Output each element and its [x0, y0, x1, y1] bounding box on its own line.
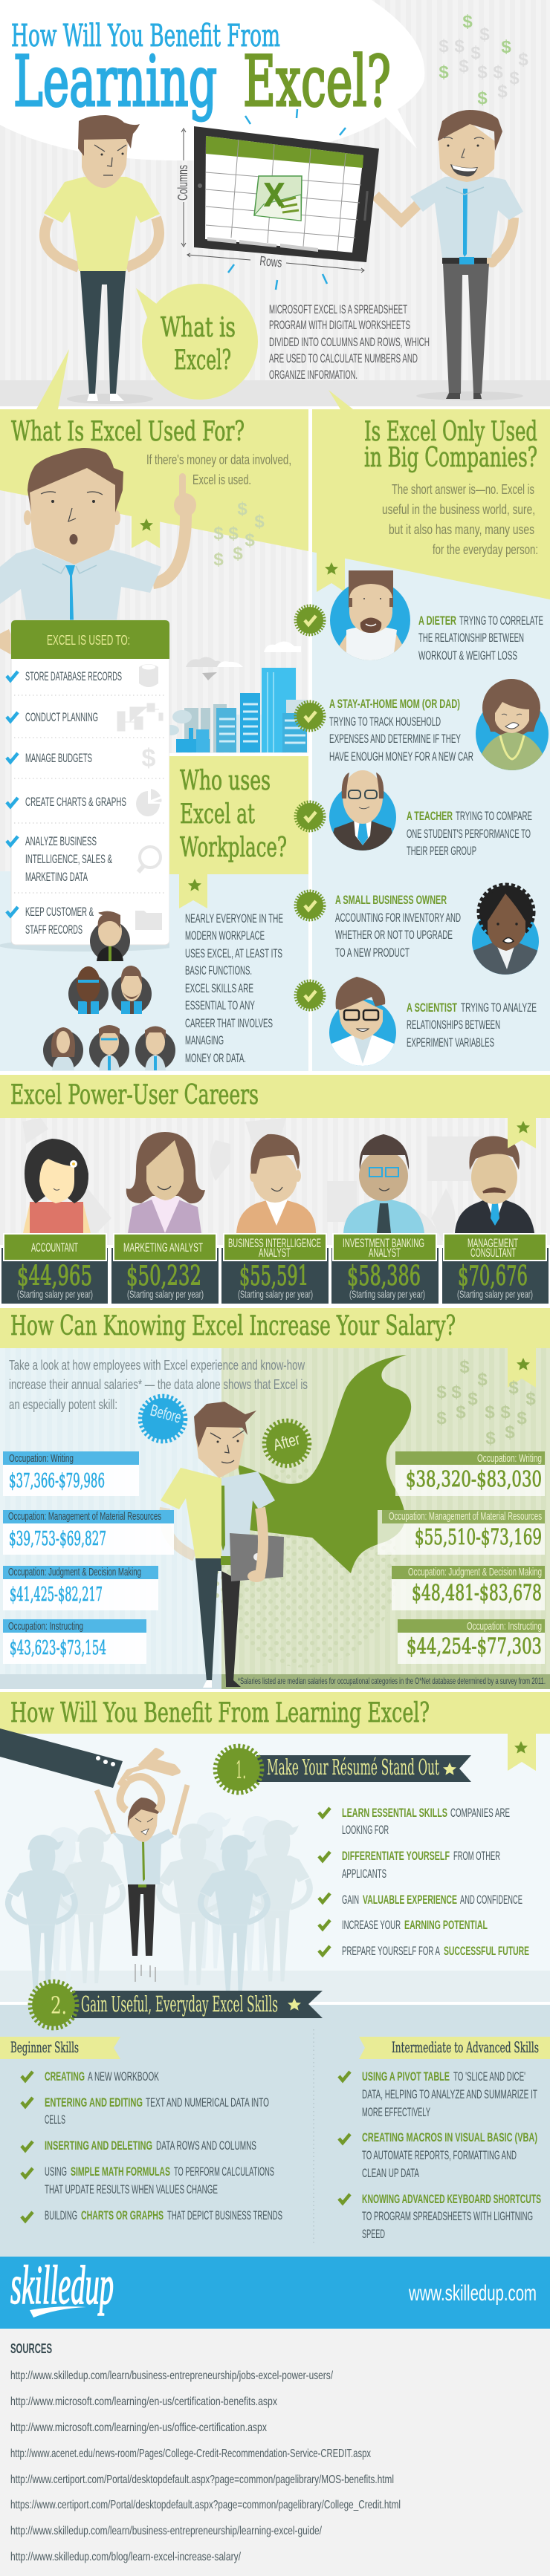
banner: gain useful skills: 2.	[51, 1991, 67, 2020]
tag: intermediate skills	[359, 2037, 550, 2059]
badge: before	[141, 1397, 184, 1440]
icon: dollar signs salary: $	[485, 1402, 495, 1422]
checklist: advanced skills: CLEAN UP DATA	[362, 2166, 419, 2180]
icon: dollar signs salary: $	[525, 1389, 536, 1409]
banner: make your resume stand out: 1.	[236, 1756, 246, 1784]
panel: sources: http://www.microsoft.com/learning/en-us/office-certification.aspx	[10, 2421, 267, 2434]
person: small business owner: ACCOUNTING FOR INVENTORY AND	[335, 911, 461, 925]
icon: dollar signs salary: $	[436, 1408, 447, 1428]
icon: falling dollar signs: $	[439, 36, 449, 56]
person: teacher	[296, 770, 532, 858]
panel: who uses Excel at workplace	[169, 753, 308, 1071]
tablet with spreadsheet	[194, 126, 379, 262]
list item: business intelligence: ANALYZE BUSINESS	[25, 834, 97, 848]
text block: definition of Excel	[269, 302, 430, 382]
card: accountant salary: $44,965	[17, 1261, 92, 1292]
panel: sources: http://www.skilledup.com/blog/learn-excel-increase-salary/	[10, 2551, 241, 2563]
list item: business intelligence	[7, 834, 161, 884]
card: management consultant salary	[442, 1234, 549, 1304]
checklist: advanced skills: SPEED	[362, 2227, 385, 2241]
list item: records	[7, 905, 162, 937]
background: intro section	[0, 0, 550, 409]
icon: falling dollar signs: $	[477, 62, 488, 82]
text block: nearly everyone: MANAGING	[185, 1033, 224, 1047]
card: marketing analyst salary	[111, 1234, 219, 1304]
ribbon: benefits	[508, 1734, 536, 1771]
card: business intelligence salary: (Starting salary per year)	[238, 1288, 313, 1300]
salary before: management	[3, 1510, 174, 1555]
panel: Excel is used to list	[0, 620, 177, 952]
icon: falling dollar signs: $	[470, 43, 481, 63]
panel: footer brand bar	[0, 2255, 550, 2329]
callout: what is Excel?	[136, 284, 258, 400]
panel: sources: http://www.acenet.edu/news-room/Pages/College-Credit-Recommendation-Service-CREDIT.aspx	[10, 2447, 371, 2460]
character: frowning man in yellow shirt	[44, 115, 160, 404]
icon: dollar signs salary: $	[456, 1402, 466, 1422]
list item: charts: CREATE CHARTS & GRAPHS	[25, 795, 126, 809]
icon: muted dollar signs: $	[213, 524, 224, 544]
panel: sources: http://www.skilledup.com/learn/business-entrepreneurship/jobs-excel-power-users/	[10, 2370, 333, 2382]
heading: who uses Excel: Who uses	[180, 766, 271, 796]
banner: make your resume stand out	[216, 1747, 471, 1792]
heading: who uses Excel	[180, 766, 287, 863]
text block: salary intro: Take a look at how employees with Excel experience and know-how	[9, 1358, 305, 1373]
list item: business intelligence: MARKETING DATA	[25, 870, 88, 884]
salary before: instructing: Occupation: Instructing	[8, 1620, 83, 1633]
icon: muted dollar signs: $	[245, 530, 255, 550]
card: business intelligence salary: ANALYST	[259, 1246, 291, 1260]
salary after: instructing	[398, 1619, 545, 1664]
panel: Excel is used to list: EXCEL IS USED TO:	[47, 633, 130, 648]
salary before: instructing: $43,623-$73,154	[10, 1637, 106, 1659]
text block: definition of Excel: ARE USED TO CALCULATE NUMBERS AND	[269, 351, 418, 365]
card: business intelligence salary: $55,591	[239, 1261, 308, 1292]
text block: short answer	[382, 482, 538, 557]
checklist: beginner skills: CREATING	[45, 2069, 85, 2084]
illustration: crowd silhouettes	[7, 1812, 310, 1997]
icon: falling dollar signs: $	[459, 56, 469, 77]
title	[11, 18, 391, 123]
salary before: judgment: Occupation: Judgment & Decision Making	[8, 1566, 141, 1578]
icon: dollar signs salary: $	[436, 1382, 447, 1402]
text block: nearly everyone: CAREER THAT INVOLVES	[185, 1016, 273, 1030]
person: small business owner	[296, 885, 543, 980]
icon: dollar signs salary: $	[508, 1378, 519, 1398]
text block: nearly everyone: MONEY OR DATA.	[185, 1051, 246, 1065]
text block: nearly everyone: ESSENTIAL TO ANY	[185, 998, 255, 1012]
salary after: writing	[395, 1451, 545, 1496]
list item: budgets: MANAGE BUDGETS	[25, 751, 92, 765]
text block: definition of Excel: DIVIDED INTO COLUMNS AND ROWS, WHICH	[269, 335, 430, 349]
icon: dollar signs salary: $	[517, 1408, 527, 1428]
panel: benefits background	[0, 1692, 550, 2257]
checklist: beginner skills: USING	[45, 2164, 67, 2179]
salary before: management: $39,753-$69,827	[9, 1528, 106, 1550]
icon: muted dollar signs: $	[228, 524, 239, 544]
salary before: writing: Occupation: Writing	[9, 1452, 74, 1465]
icon: falling dollar signs: $	[493, 62, 503, 82]
salary after: judgment	[392, 1566, 545, 1610]
card: accountant salary: ACCOUNTANT	[31, 1240, 78, 1255]
panel: sources: https://www.certiport.com/Portal/desktopdefault.aspx?page=common/pagelibrary/College_Credit.html	[10, 2499, 401, 2511]
icon: ribbon stars	[140, 518, 338, 575]
checklist: advanced skills	[339, 2069, 541, 2241]
badge: before: Before	[149, 1401, 184, 1427]
ribbon: salary	[508, 1348, 536, 1388]
salary before: management: Occupation: Management of Material Resources	[8, 1510, 161, 1523]
text block: money or data: Excel is used.	[192, 472, 251, 487]
checklist: resume benefits	[319, 1806, 529, 1958]
text block: definition of Excel: PROGRAM WITH DIGITAL WORKSHEETS	[269, 318, 410, 332]
text block: nearly everyone: USES EXCEL, AT LEAST ITS	[185, 946, 282, 960]
heading: only big companies	[364, 417, 537, 473]
logo: skilledup: skilledup	[10, 2255, 114, 2316]
rows axis label	[187, 253, 364, 273]
checklist: resume benefits: EARNING POTENTIAL	[404, 1918, 488, 1932]
checklist: beginner skills: CELLS	[45, 2112, 65, 2127]
text block: money or data	[146, 452, 291, 487]
card: business intelligence salary: BUSINESS INTERLLIGENCE	[228, 1236, 321, 1250]
checklist: resume benefits: APPLICANTS	[342, 1867, 386, 1881]
text block: nearly everyone	[185, 911, 283, 1065]
salary after: management	[378, 1510, 545, 1555]
checklist: resume benefits: PREPARE YOURSELF FOR A	[342, 1944, 440, 1958]
list item: planning: CONDUCT PLANNING	[25, 710, 98, 724]
illustration: city skyline	[163, 641, 307, 752]
checklist: beginner skills: THAT UPDATE RESULTS WHEN VALUES CHANGE	[45, 2182, 218, 2196]
tag: beginner skills: Beginner Skills	[10, 2038, 79, 2056]
card: marketing analyst salary: MARKETING ANALYST	[123, 1240, 203, 1255]
person: investment banking analyst	[343, 1134, 424, 1233]
checklist: beginner skills: A NEW WORKBOOK	[88, 2069, 159, 2084]
text block: salary intro: increase their annual salaries* — the data alone shows that Excel is	[9, 1377, 308, 1392]
icon: dollar signs salary: $	[500, 1402, 511, 1422]
text block: nearly everyone: MODERN WORKPLACE	[185, 928, 265, 943]
person: scientist: A SCIENTIST	[407, 1001, 457, 1015]
icon: dollar signs salary	[436, 1357, 536, 1448]
checklist: advanced skills: USING A PIVOT TABLE	[362, 2069, 450, 2084]
checklist: resume benefits: FROM OTHER	[453, 1849, 500, 1863]
icon: falling dollar signs: $	[454, 36, 465, 56]
card: business intelligence salary	[221, 1234, 329, 1304]
panel: sources: SOURCES	[10, 2341, 52, 2356]
list item: records: KEEP CUSTOMER &	[25, 905, 94, 919]
banner: gain useful skills: Gain Useful, Everyday Excel Skills	[81, 1991, 278, 2017]
salary before: writing	[3, 1451, 139, 1496]
checklist: beginner skills: DATA ROWS AND COLUMNS	[156, 2138, 256, 2153]
salary before: judgment: $41,425-$82,217	[10, 1584, 103, 1606]
person: scientist	[296, 977, 537, 1070]
character: smiling man in blue shirt	[375, 110, 523, 400]
text block: money or data: If there's money or data involved,	[146, 452, 291, 467]
card: investment banking salary	[331, 1234, 439, 1304]
person: stay at home parent	[296, 679, 549, 773]
icon: dollar signs salary: $	[451, 1382, 462, 1402]
checklist: beginner skills: ENTERING AND EDITING	[45, 2095, 143, 2110]
card: investment banking salary: (Starting salary per year)	[349, 1288, 425, 1300]
character: before and after man	[161, 1402, 284, 1688]
icon: dollar signs salary: $	[477, 1370, 488, 1390]
icon: Excel logo	[254, 176, 302, 221]
person: small business owner: A SMALL BUSINESS OWNER	[335, 893, 447, 907]
person: dieter	[296, 570, 543, 665]
panel: backgrounds of usage sections	[0, 349, 550, 1075]
panel: sources: http://www.microsoft.com/learning/en-us/certification-benefits.aspx	[10, 2396, 277, 2408]
person: accountant	[23, 1139, 91, 1233]
badge: after	[265, 1422, 308, 1465]
heading: who uses Excel: Workplace?	[180, 833, 287, 863]
icon: muted dollar signs: $	[233, 544, 243, 564]
card: accountant salary	[1, 1234, 108, 1304]
icon: falling dollar signs: $	[479, 25, 490, 45]
list item: budgets	[7, 744, 156, 773]
panel: salary section background	[0, 1308, 550, 1692]
text block: salary intro: an especially potent skill:	[9, 1397, 117, 1412]
checklist: beginner skills: BUILDING	[45, 2208, 77, 2222]
card: investment banking salary: INVESTMENT BANKING	[343, 1236, 424, 1250]
icon: falling dollar signs	[439, 12, 528, 108]
panel: sources	[0, 2329, 550, 2576]
panel: sources: http://www.certiport.com/Portal/desktopdefault.aspx?page=common/pagelibrary/MOS-benefits.html	[10, 2473, 394, 2486]
text block: definition of Excel: ORGANIZE INFORMATION.	[269, 368, 358, 382]
icon: falling dollar signs: $	[477, 88, 488, 108]
list item: database	[7, 664, 158, 687]
icon: falling dollar signs: $	[497, 82, 508, 102]
card: marketing analyst salary: $50,232	[126, 1261, 201, 1292]
highlight dashes around the tablet	[228, 109, 346, 290]
checklist: resume benefits: LEARN ESSENTIAL SKILLS	[342, 1806, 447, 1820]
text block: nearly everyone: BASIC FUNCTIONS.	[185, 963, 252, 978]
icon: muted dollar signs: $	[237, 499, 248, 519]
heading: careers: Excel Power-User Careers	[10, 1080, 259, 1110]
callout: what is Excel?: What is	[161, 313, 236, 343]
person: business intelligence analyst	[236, 1134, 316, 1233]
title: Excel?	[243, 42, 391, 123]
person: small business owner: WHETHER OR NOT TO UPGRADE	[335, 928, 453, 942]
text block: salary intro	[9, 1358, 308, 1412]
character: man pointing upward	[0, 448, 196, 656]
salary before: judgment	[3, 1566, 158, 1610]
heading: who uses Excel: Excel at	[180, 799, 255, 830]
panel: sources: http://www.skilledup.com/learn/business-entrepreneurship/learning-excel-guide/	[10, 2525, 322, 2537]
checklist: beginner skills: SIMPLE MATH FORMULAS	[71, 2164, 170, 2179]
logo: skilledup	[10, 2255, 114, 2318]
icon: dollar signs salary: $	[485, 1428, 496, 1448]
icon: falling dollar signs: $	[501, 37, 511, 57]
list item: budgets: $	[142, 744, 156, 773]
illustration: green cape	[238, 1355, 411, 1573]
panel: careers background	[0, 1075, 550, 1308]
checklist: resume benefits: GAIN	[342, 1893, 359, 1907]
icon: dollar signs salary: $	[459, 1357, 470, 1377]
title: Learning	[13, 42, 217, 123]
person: stay at home parent: EXPENSES AND DETERMINE IF THEY	[329, 732, 461, 746]
person: small business owner: TO A NEW PRODUCT	[335, 946, 410, 960]
columns axis label: Columns	[175, 165, 190, 201]
icon: falling dollar signs: $	[439, 62, 449, 82]
checklist: resume benefits: VALUABLE EXPERIENCE	[363, 1893, 457, 1907]
list item: database: STORE DATABASE RECORDS	[25, 669, 122, 683]
person: management consultant	[455, 1136, 534, 1233]
columns axis label	[175, 129, 190, 247]
checklist: resume benefits: LOOKING FOR	[342, 1823, 389, 1837]
card: accountant salary: (Starting salary per year)	[17, 1288, 93, 1300]
text block: nearly everyone: NEARLY EVERYONE IN THE	[185, 911, 283, 926]
checklist: beginner skills: TEXT AND NUMERICAL DATA INTO	[146, 2095, 269, 2110]
person: dieter: A DIETER	[418, 614, 456, 628]
person: teacher: A TEACHER	[407, 809, 453, 823]
icon: muted dollar signs	[213, 499, 265, 570]
icon: falling dollar signs: $	[518, 50, 528, 70]
person: marketing analyst	[126, 1132, 205, 1233]
text block: nearly everyone: EXCEL SKILLS ARE	[185, 981, 253, 995]
person: stay at home parent: A STAY-AT-HOME MOM (OR DAD)	[329, 697, 460, 711]
list item: records: STAFF RECORDS	[25, 923, 82, 937]
heading: what is Excel used for: What Is Excel Used For?	[11, 417, 245, 447]
list item: charts	[7, 789, 162, 816]
list item: planning	[7, 703, 163, 731]
callout: what is Excel?: Excel?	[174, 345, 231, 376]
checklist: resume benefits: DIFFERENTIATE YOURSELF	[342, 1849, 450, 1863]
speech bubble	[0, 0, 424, 160]
card: investment banking salary: $58,386	[347, 1261, 421, 1292]
list item: business intelligence: INTELLIGENCE, SALES &	[25, 852, 112, 866]
person: stay at home parent: TRYING TO TRACK HOUSEHOLD	[329, 715, 441, 729]
card: investment banking salary: ANALYST	[369, 1246, 401, 1260]
checklist: beginner skills: THAT DEPICT BUSINESS TRENDS	[167, 2208, 282, 2222]
title: How Will You Benefit From	[11, 18, 280, 53]
text block: definition of Excel: MICROSOFT EXCEL IS A SPREADSHEET	[269, 302, 407, 316]
salary before: instructing	[3, 1619, 146, 1664]
checklist: beginner skills: INSERTING AND DELETING	[45, 2138, 152, 2153]
illustration: hand lifting jumping man	[0, 1728, 187, 1982]
person: teacher: THEIR PEER GROUP	[407, 844, 476, 858]
banner: gain useful skills	[31, 1983, 323, 2027]
icon: muted dollar signs: $	[254, 512, 265, 532]
avatars: pyramid of workers	[43, 911, 175, 1070]
icon: falling dollar signs: $	[509, 68, 520, 88]
icon: muted dollar signs: $	[213, 550, 224, 570]
ribbon: careers	[508, 1118, 536, 1148]
icon: dollar signs salary: $	[505, 1422, 515, 1443]
checklist: beginner skills: CHARTS OR GRAPHS	[81, 2208, 164, 2222]
icon: dollar signs salary: $	[468, 1389, 478, 1409]
icon: falling dollar signs: $	[462, 12, 473, 32]
salary before: writing: $37,366-$79,986	[9, 1470, 105, 1492]
badge: after: After	[271, 1429, 302, 1454]
icon: Excel logo: X	[263, 177, 285, 215]
checklist: resume benefits: INCREASE YOUR	[342, 1918, 401, 1932]
card: marketing analyst salary: (Starting salary per year)	[127, 1288, 204, 1300]
checklist: advanced skills: MORE EFFECTIVELY	[362, 2105, 430, 2119]
checklist: beginner skills	[22, 2069, 282, 2222]
rows axis label: Rows	[259, 253, 282, 270]
checklist: beginner skills: TO PERFORM CALCULATIONS	[174, 2164, 274, 2179]
column divider	[313, 2029, 314, 2243]
